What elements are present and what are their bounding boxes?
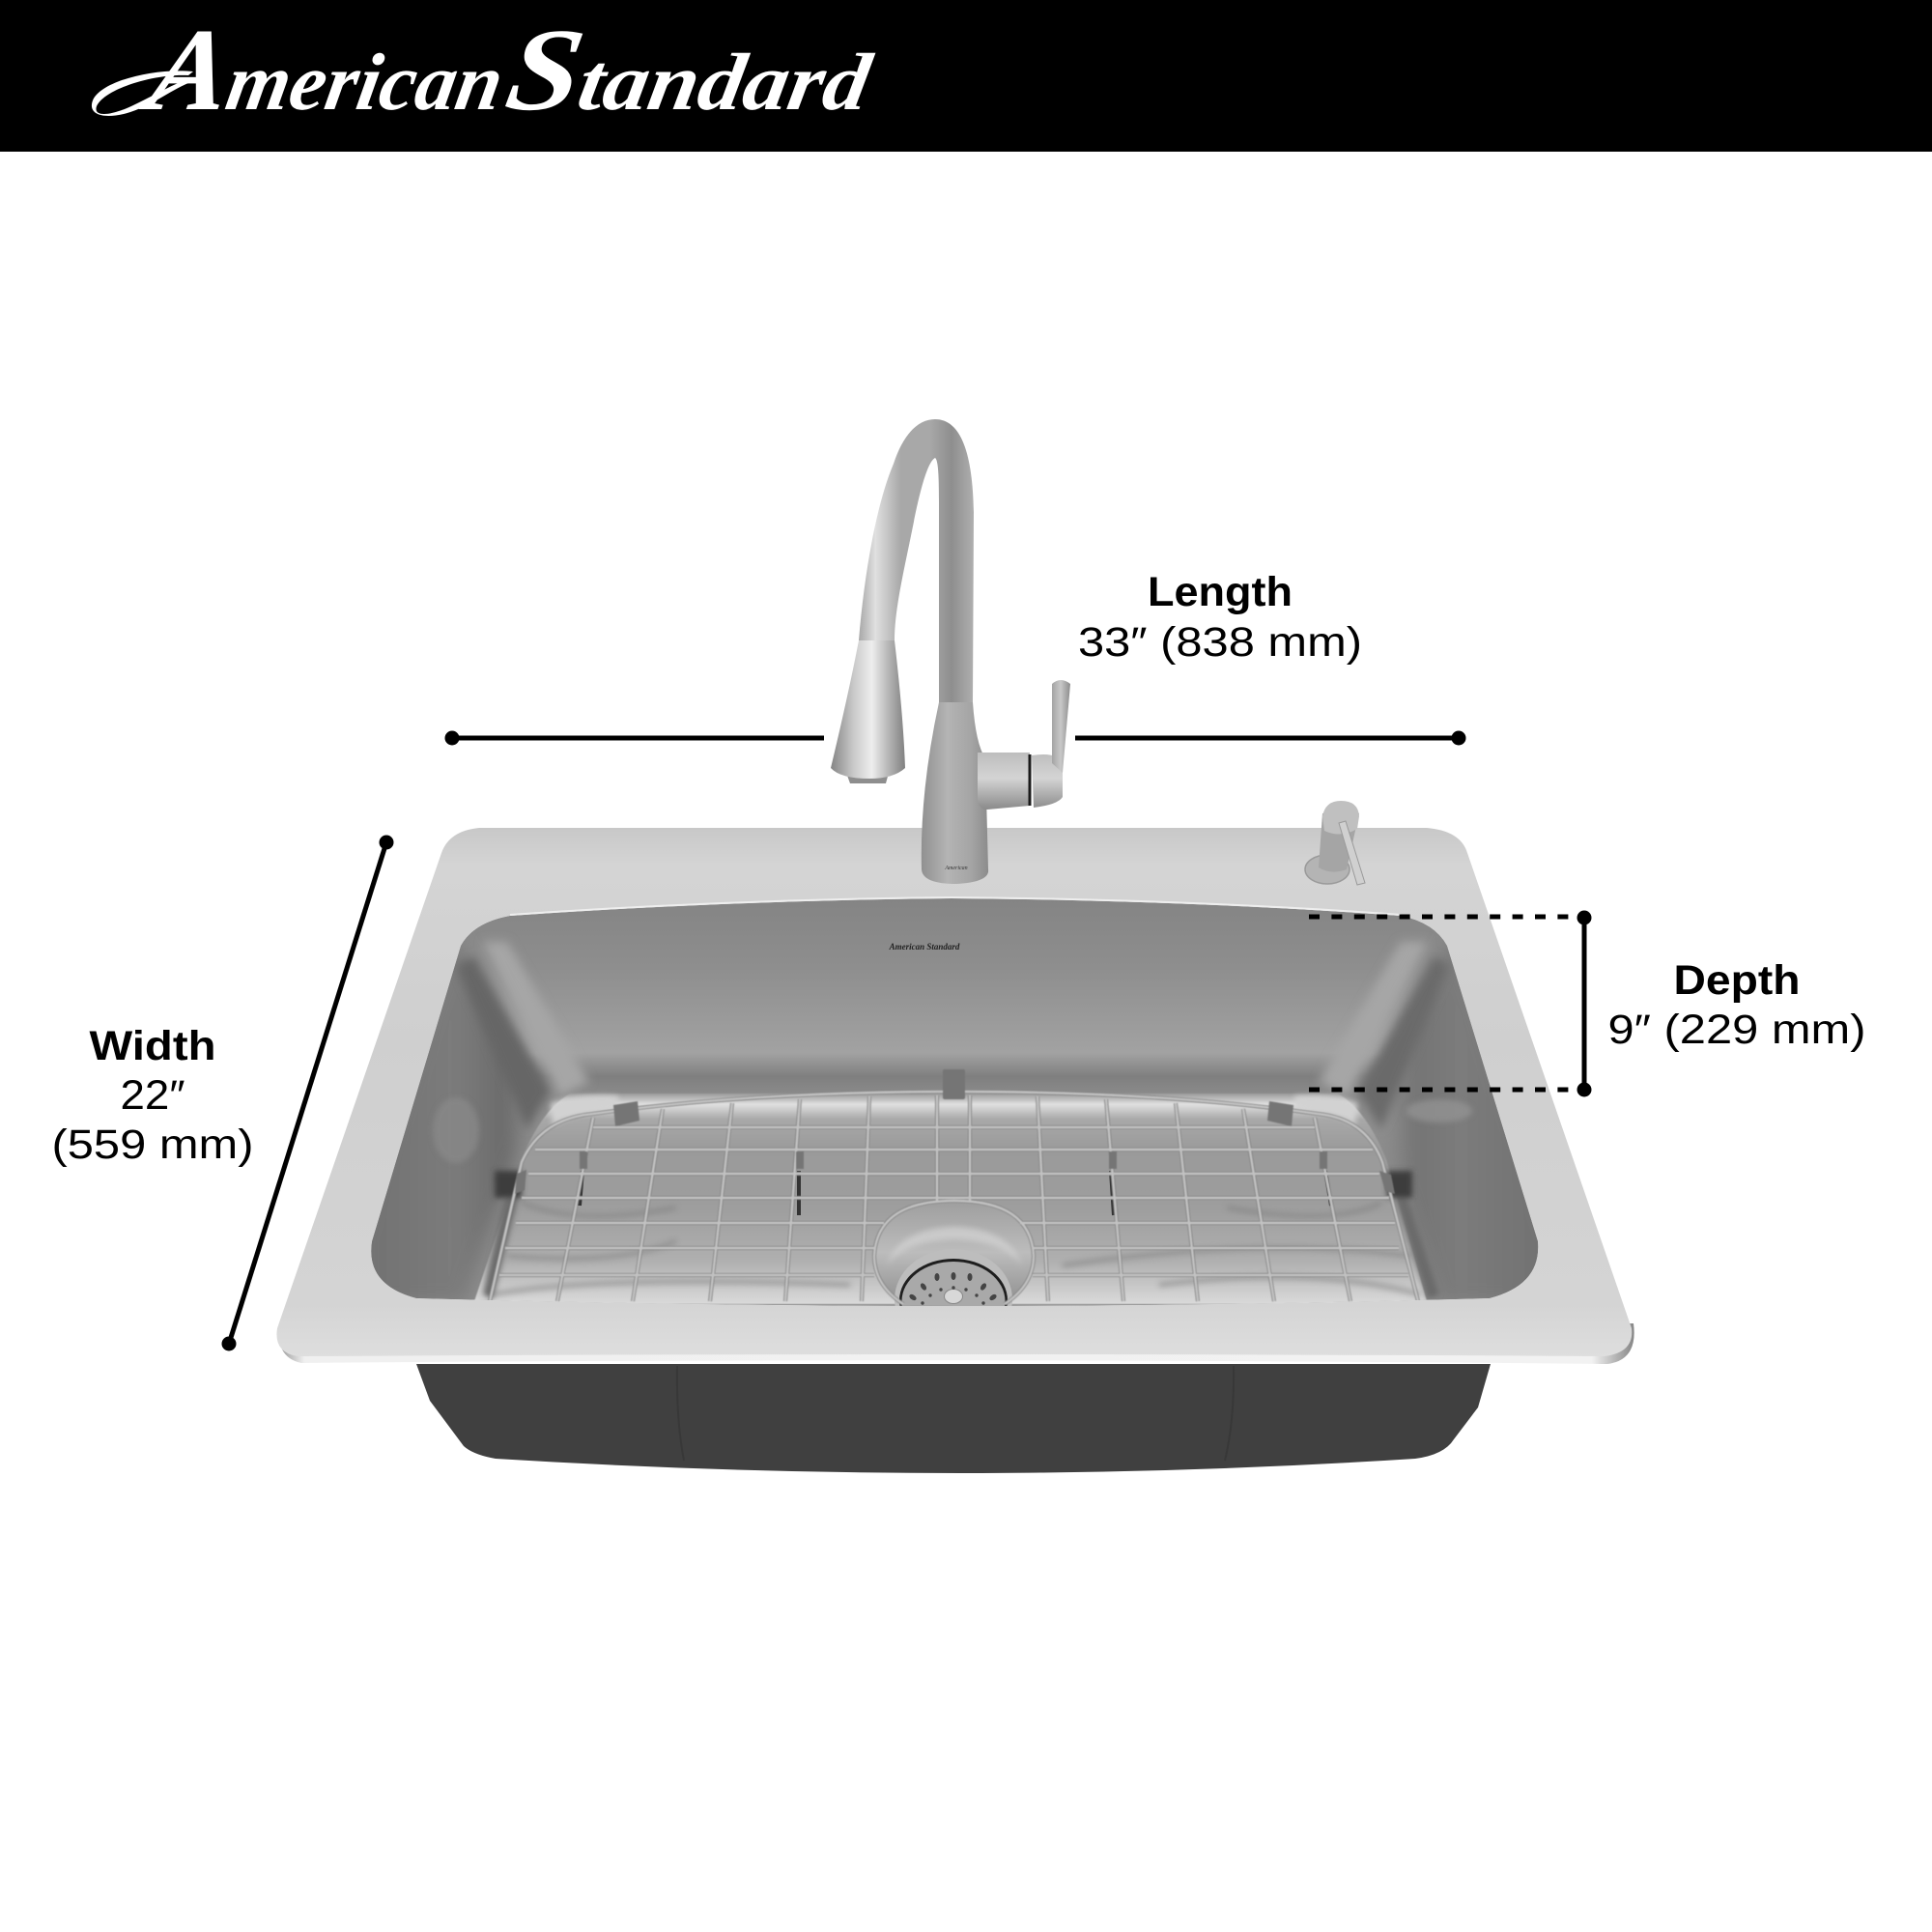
- basin floor: [473, 1094, 1428, 1304]
- grid clips: [515, 1069, 1395, 1194]
- rim thickness edge: [279, 1323, 1634, 1364]
- width value mm: (559 mm): [52, 1122, 253, 1168]
- width label: Width: [89, 1023, 216, 1069]
- basin interior: [371, 898, 1538, 1306]
- header band: [0, 0, 1932, 152]
- pull-down spray head: [831, 640, 905, 783]
- depth marker: [1309, 910, 1592, 1097]
- length label: Length: [1148, 569, 1293, 615]
- handle block: [978, 753, 1030, 810]
- dispenser body: [1319, 813, 1359, 872]
- sink: [276, 828, 1634, 1473]
- leg shadows: [580, 1171, 1331, 1215]
- dimension: depth: [1309, 910, 1866, 1097]
- cup highlight band: [893, 1225, 1016, 1258]
- right wall: [1397, 949, 1538, 1300]
- wire grid: [490, 1069, 1418, 1304]
- corner highlights: [433, 1095, 1472, 1299]
- left wall: [371, 950, 526, 1300]
- basin stamped logo: American Standard: [889, 942, 960, 952]
- depth label: Depth: [1673, 957, 1801, 1004]
- soap dispenser: [1305, 801, 1365, 885]
- dispenser head: [1322, 801, 1359, 835]
- length value: 33″ (838 mm): [1078, 619, 1362, 666]
- back wall: [458, 898, 1451, 1084]
- wall corner streaks: [456, 942, 1449, 1130]
- dispenser base: [1305, 855, 1350, 884]
- faucet: [831, 419, 1070, 884]
- faucet base: [922, 702, 988, 884]
- gooseneck spout: [859, 419, 974, 702]
- width line: [222, 835, 394, 1350]
- drain strainer: [895, 1259, 1012, 1306]
- lever: [1052, 680, 1070, 773]
- logo: American Standard: [92, 4, 885, 135]
- handle ring: [1028, 754, 1032, 806]
- dimension: width: [52, 835, 394, 1350]
- length line right: [1075, 730, 1466, 746]
- handle cap: [1032, 754, 1063, 808]
- floor shadows: [493, 1203, 1420, 1294]
- logo: American Standard: Standard: [497, 4, 885, 135]
- rim deck: [276, 828, 1632, 1356]
- base logo: American: [944, 866, 968, 871]
- pump lever: [1339, 821, 1365, 885]
- depth value: 9″ (229 mm): [1607, 1007, 1866, 1053]
- width value inches: 22″: [120, 1072, 185, 1119]
- cup around drain: [877, 1220, 1032, 1296]
- length line left: [444, 730, 824, 746]
- sink underside body: [416, 1364, 1491, 1473]
- logo: American Standard: American: [133, 4, 516, 135]
- dimension: length: [444, 569, 1466, 746]
- rim inner highlight: [510, 897, 1401, 915]
